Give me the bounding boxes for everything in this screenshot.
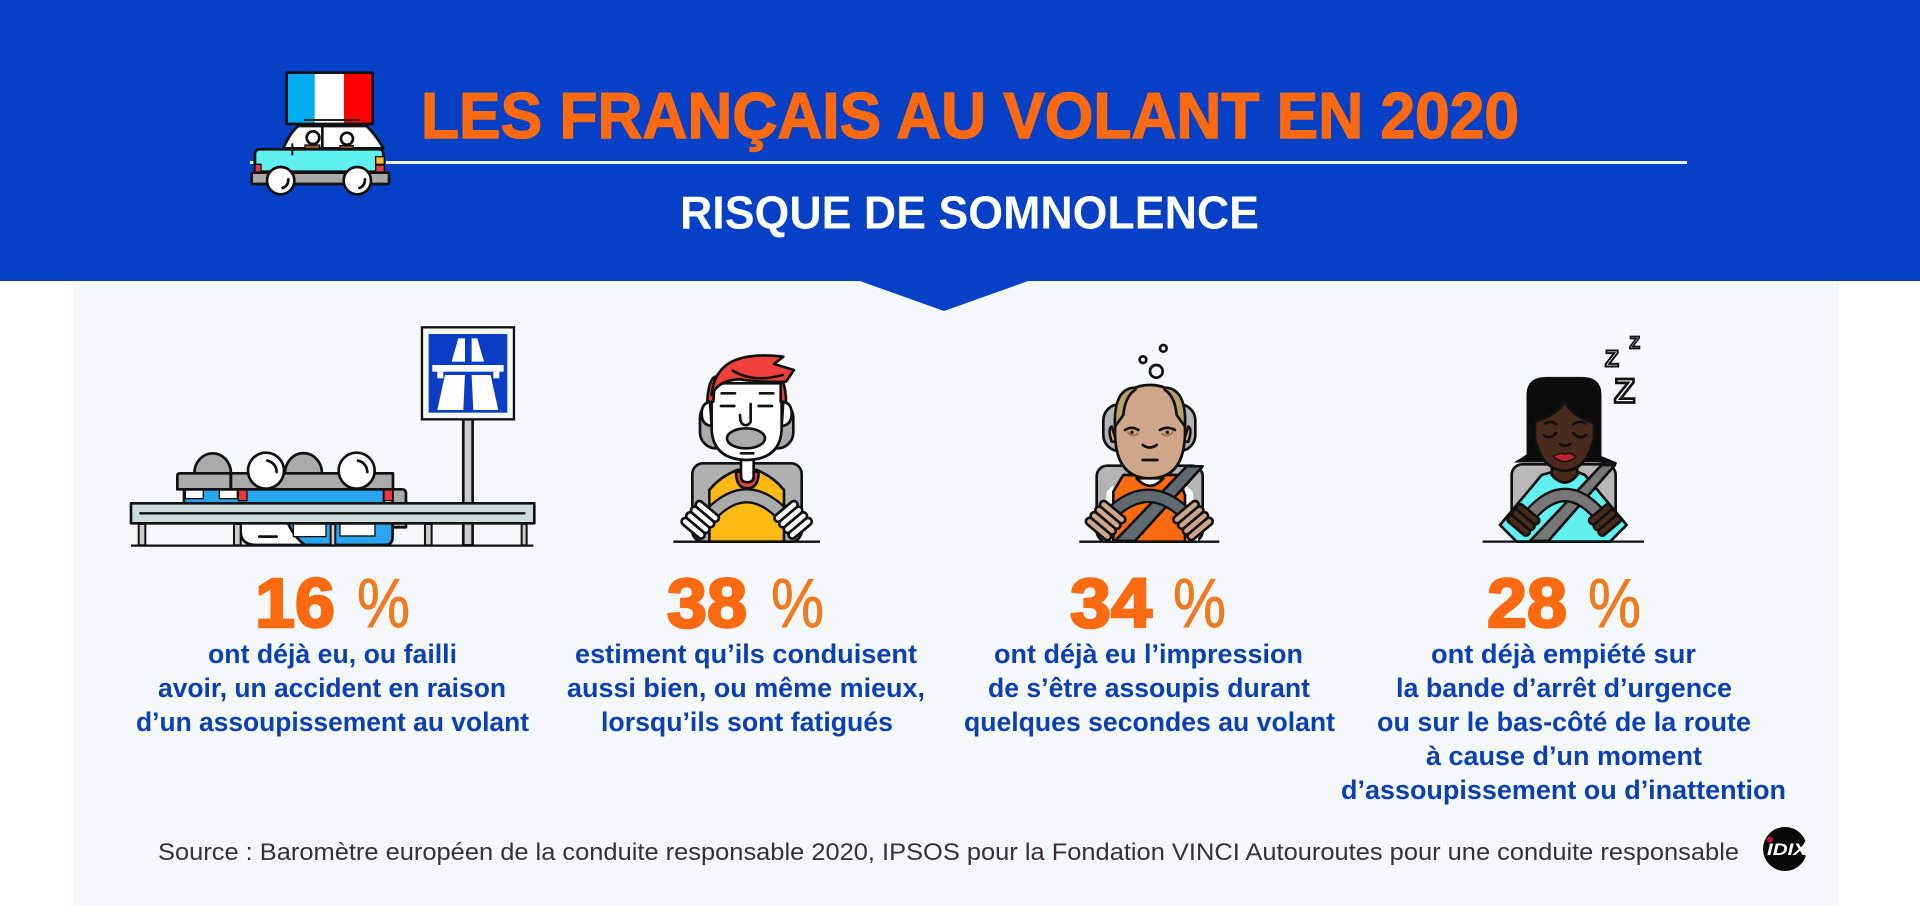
icon: overturned car <box>177 453 406 545</box>
stat: 16 %: 16 <box>255 564 335 642</box>
stat: 28 %: 28 <box>1487 564 1567 642</box>
source line: Source : Baromètre européen de la conduite responsable 2020, IPSOS pour la Fondation VINCI Autouroutes pour une conduite responsable <box>158 839 1739 866</box>
subtitle: RISQUE DE SOMNOLENCE <box>680 186 1259 238</box>
hair: right patch <box>1164 388 1185 427</box>
text block: column 3: quelques secondes au volant <box>964 707 1335 737</box>
text block: column 4: ou sur le bas-côté de la route <box>1377 707 1751 737</box>
text block: column 2: lorsqu’ils sont fatigués <box>601 707 893 737</box>
icon: sleep letters: Z <box>1629 332 1640 352</box>
icon: guard rail <box>131 503 534 546</box>
text block: column 3 <box>964 639 1335 737</box>
icon: IDIX logo <box>1763 827 1810 871</box>
stat: 38 %: % <box>771 564 824 642</box>
text block: column 2: estiment qu’ils conduisent <box>575 639 917 669</box>
stat: 38 %: 38 <box>667 564 747 642</box>
icon: IDIX logo: IDIX <box>1767 840 1809 859</box>
stat: 34 % <box>1070 564 1226 642</box>
icon: car with French flag <box>250 73 389 194</box>
icon: right hand <box>773 500 813 540</box>
icon: right hand <box>1172 499 1214 542</box>
icon: right hand <box>1588 503 1622 537</box>
stat: 38 % <box>667 564 824 642</box>
text block: column 4: à cause d’un moment <box>1426 741 1702 771</box>
icon: sleep letters <box>1605 332 1640 410</box>
text block: column 1 <box>136 639 529 737</box>
stat: 28 % <box>1487 564 1641 642</box>
icon: snoring red-haired driver <box>673 355 820 542</box>
icon: sleeping woman driver <box>1483 332 1644 542</box>
icon: left hand <box>1084 499 1127 542</box>
icon: bald drowsy driver <box>1079 345 1219 542</box>
icon: sleep letters: Z <box>1605 346 1619 372</box>
stat: 16 % <box>255 564 410 642</box>
icon: left hand <box>680 500 720 540</box>
text block: column 3: ont déjà eu l’impression <box>994 639 1303 669</box>
title: LES FRANÇAIS AU VOLANT EN 2020 <box>421 79 1519 152</box>
hair: left patch <box>1115 388 1136 427</box>
icon: left hand <box>1506 503 1541 537</box>
text block: column 4 <box>1341 639 1786 805</box>
text block: column 1: d’un assoupissement au volant <box>136 707 529 737</box>
icon: motorway sign <box>422 327 514 545</box>
text block: column 1: ont déjà eu, ou failli <box>208 639 457 669</box>
text block: column 1: avoir, un accident en raison <box>158 673 506 703</box>
stat: 34 %: 34 <box>1070 564 1152 642</box>
text block: column 4: ont déjà empiété sur <box>1431 639 1696 669</box>
text block: column 2 <box>567 639 925 737</box>
stat: 34 %: % <box>1173 564 1226 642</box>
stat: 28 %: % <box>1588 564 1641 642</box>
panel: light background <box>73 281 1839 906</box>
text block: column 4: la bande d’arrêt d’urgence <box>1396 673 1732 703</box>
icon: overturned car on motorway with sign <box>131 327 534 546</box>
stat: 16 %: % <box>357 564 410 642</box>
text block: column 3: de s’être assoupis durant <box>988 673 1310 703</box>
icon: sleep letters: Z <box>1614 372 1635 410</box>
text block: column 4: d’assoupissement ou d’inattention <box>1341 775 1786 805</box>
header band <box>0 0 1920 311</box>
text block: column 2: aussi bien, ou même mieux, <box>567 673 925 703</box>
